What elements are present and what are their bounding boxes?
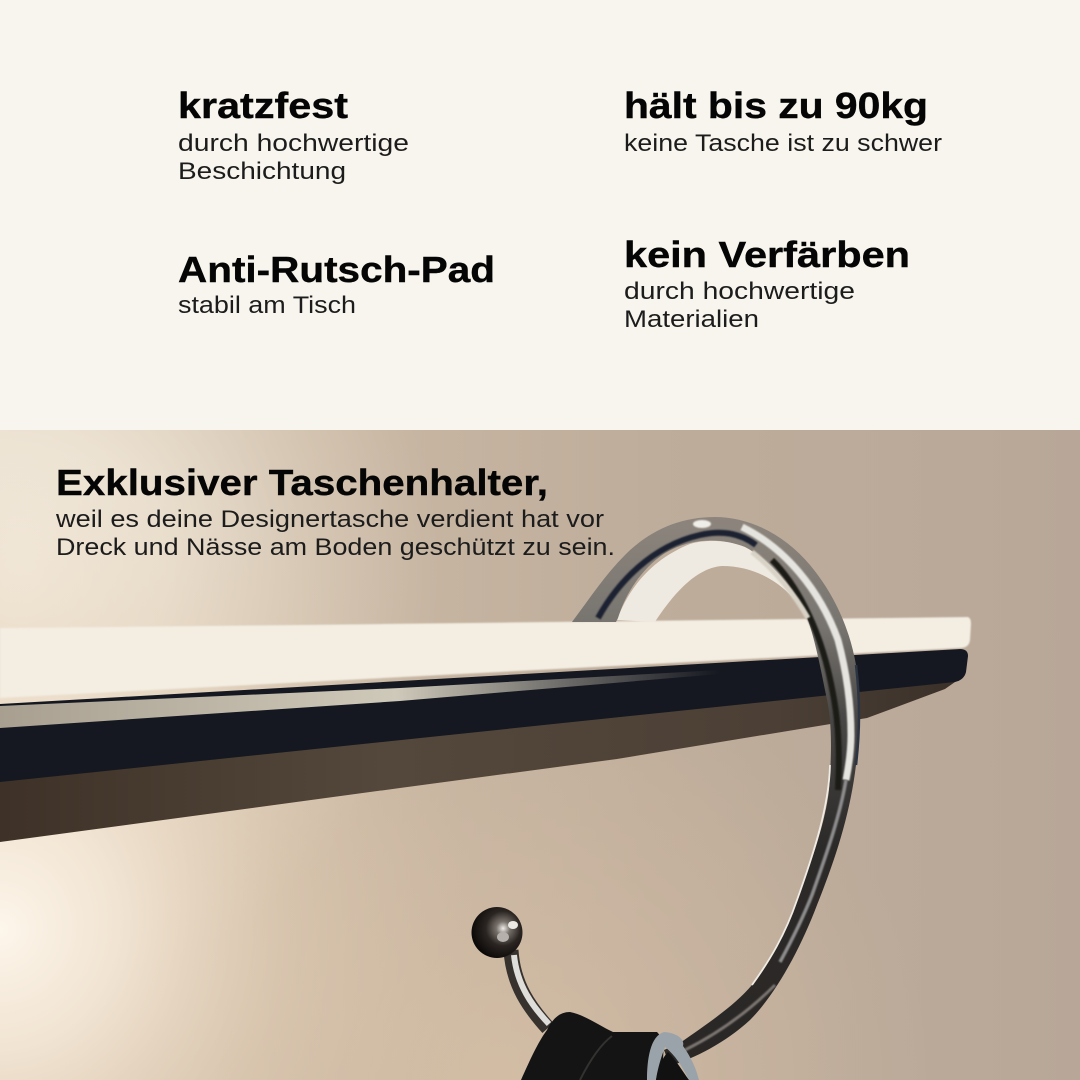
feature: kein Verfärben: kein Verfärben: [624, 234, 910, 275]
feature: kratzfest: Beschichtung: [178, 158, 346, 185]
hook: small arm to ball: [511, 950, 549, 1028]
feature: Anti-Rutsch-Pad: Anti-Rutsch-Pad: [178, 249, 495, 290]
feature: kein Verfärben: durch hochwertige: [624, 278, 855, 305]
feature: hält bis zu 90kg: [624, 85, 942, 157]
table black edge: [0, 649, 968, 782]
strap: fold line: [580, 1036, 612, 1080]
bag strap: [521, 1012, 699, 1080]
hook: shoulder bright strip: [742, 527, 851, 780]
background: cream feature panel: [0, 0, 1080, 430]
feature: hält bis zu 90kg: keine Tasche ist zu schwer: [624, 130, 942, 157]
photo description: weil es deine Designertasche verdient hat vor: [55, 506, 604, 533]
strap: dark inner: [656, 1052, 689, 1080]
hook: chrome ring body: [572, 517, 859, 1066]
hook: lower ring highlights: [685, 765, 846, 1050]
table underside: [0, 675, 965, 842]
photo description: [55, 506, 615, 561]
feature: kein Verfärben: Materialien: [624, 306, 759, 333]
photo background wall: [0, 430, 1080, 1080]
feature: kein Verfärben: [624, 234, 910, 333]
feature: kratzfest: durch hochwertige: [178, 130, 409, 157]
photo description: Dreck und Nässe am Boden geschützt zu sein.: [56, 534, 615, 561]
photo headline: Exklusiver Taschenhalter,: [56, 462, 548, 503]
table edge reflection: [0, 670, 720, 728]
strap: silver loop: [647, 1032, 699, 1080]
photo: table edge with bag hook: [0, 430, 1080, 1080]
hook: top glint: [693, 520, 711, 528]
hook: blue edge: [856, 665, 859, 765]
hook: inner shoulder glow: [752, 552, 808, 618]
feature: kratzfest: [178, 85, 409, 185]
feature: kratzfest: kratzfest: [178, 85, 348, 126]
feature: Anti-Rutsch-Pad: stabil am Tisch: [178, 292, 356, 319]
table white top and front: [0, 617, 971, 698]
feature: Anti-Rutsch-Pad: [178, 249, 495, 319]
hook: dark inner band: [598, 533, 756, 618]
hook: ball end: [472, 907, 522, 958]
hook: white reflection in arc: [617, 541, 808, 622]
feature: hält bis zu 90kg: hält bis zu 90kg: [624, 85, 928, 126]
hook: dark shoulder strip: [772, 560, 839, 790]
